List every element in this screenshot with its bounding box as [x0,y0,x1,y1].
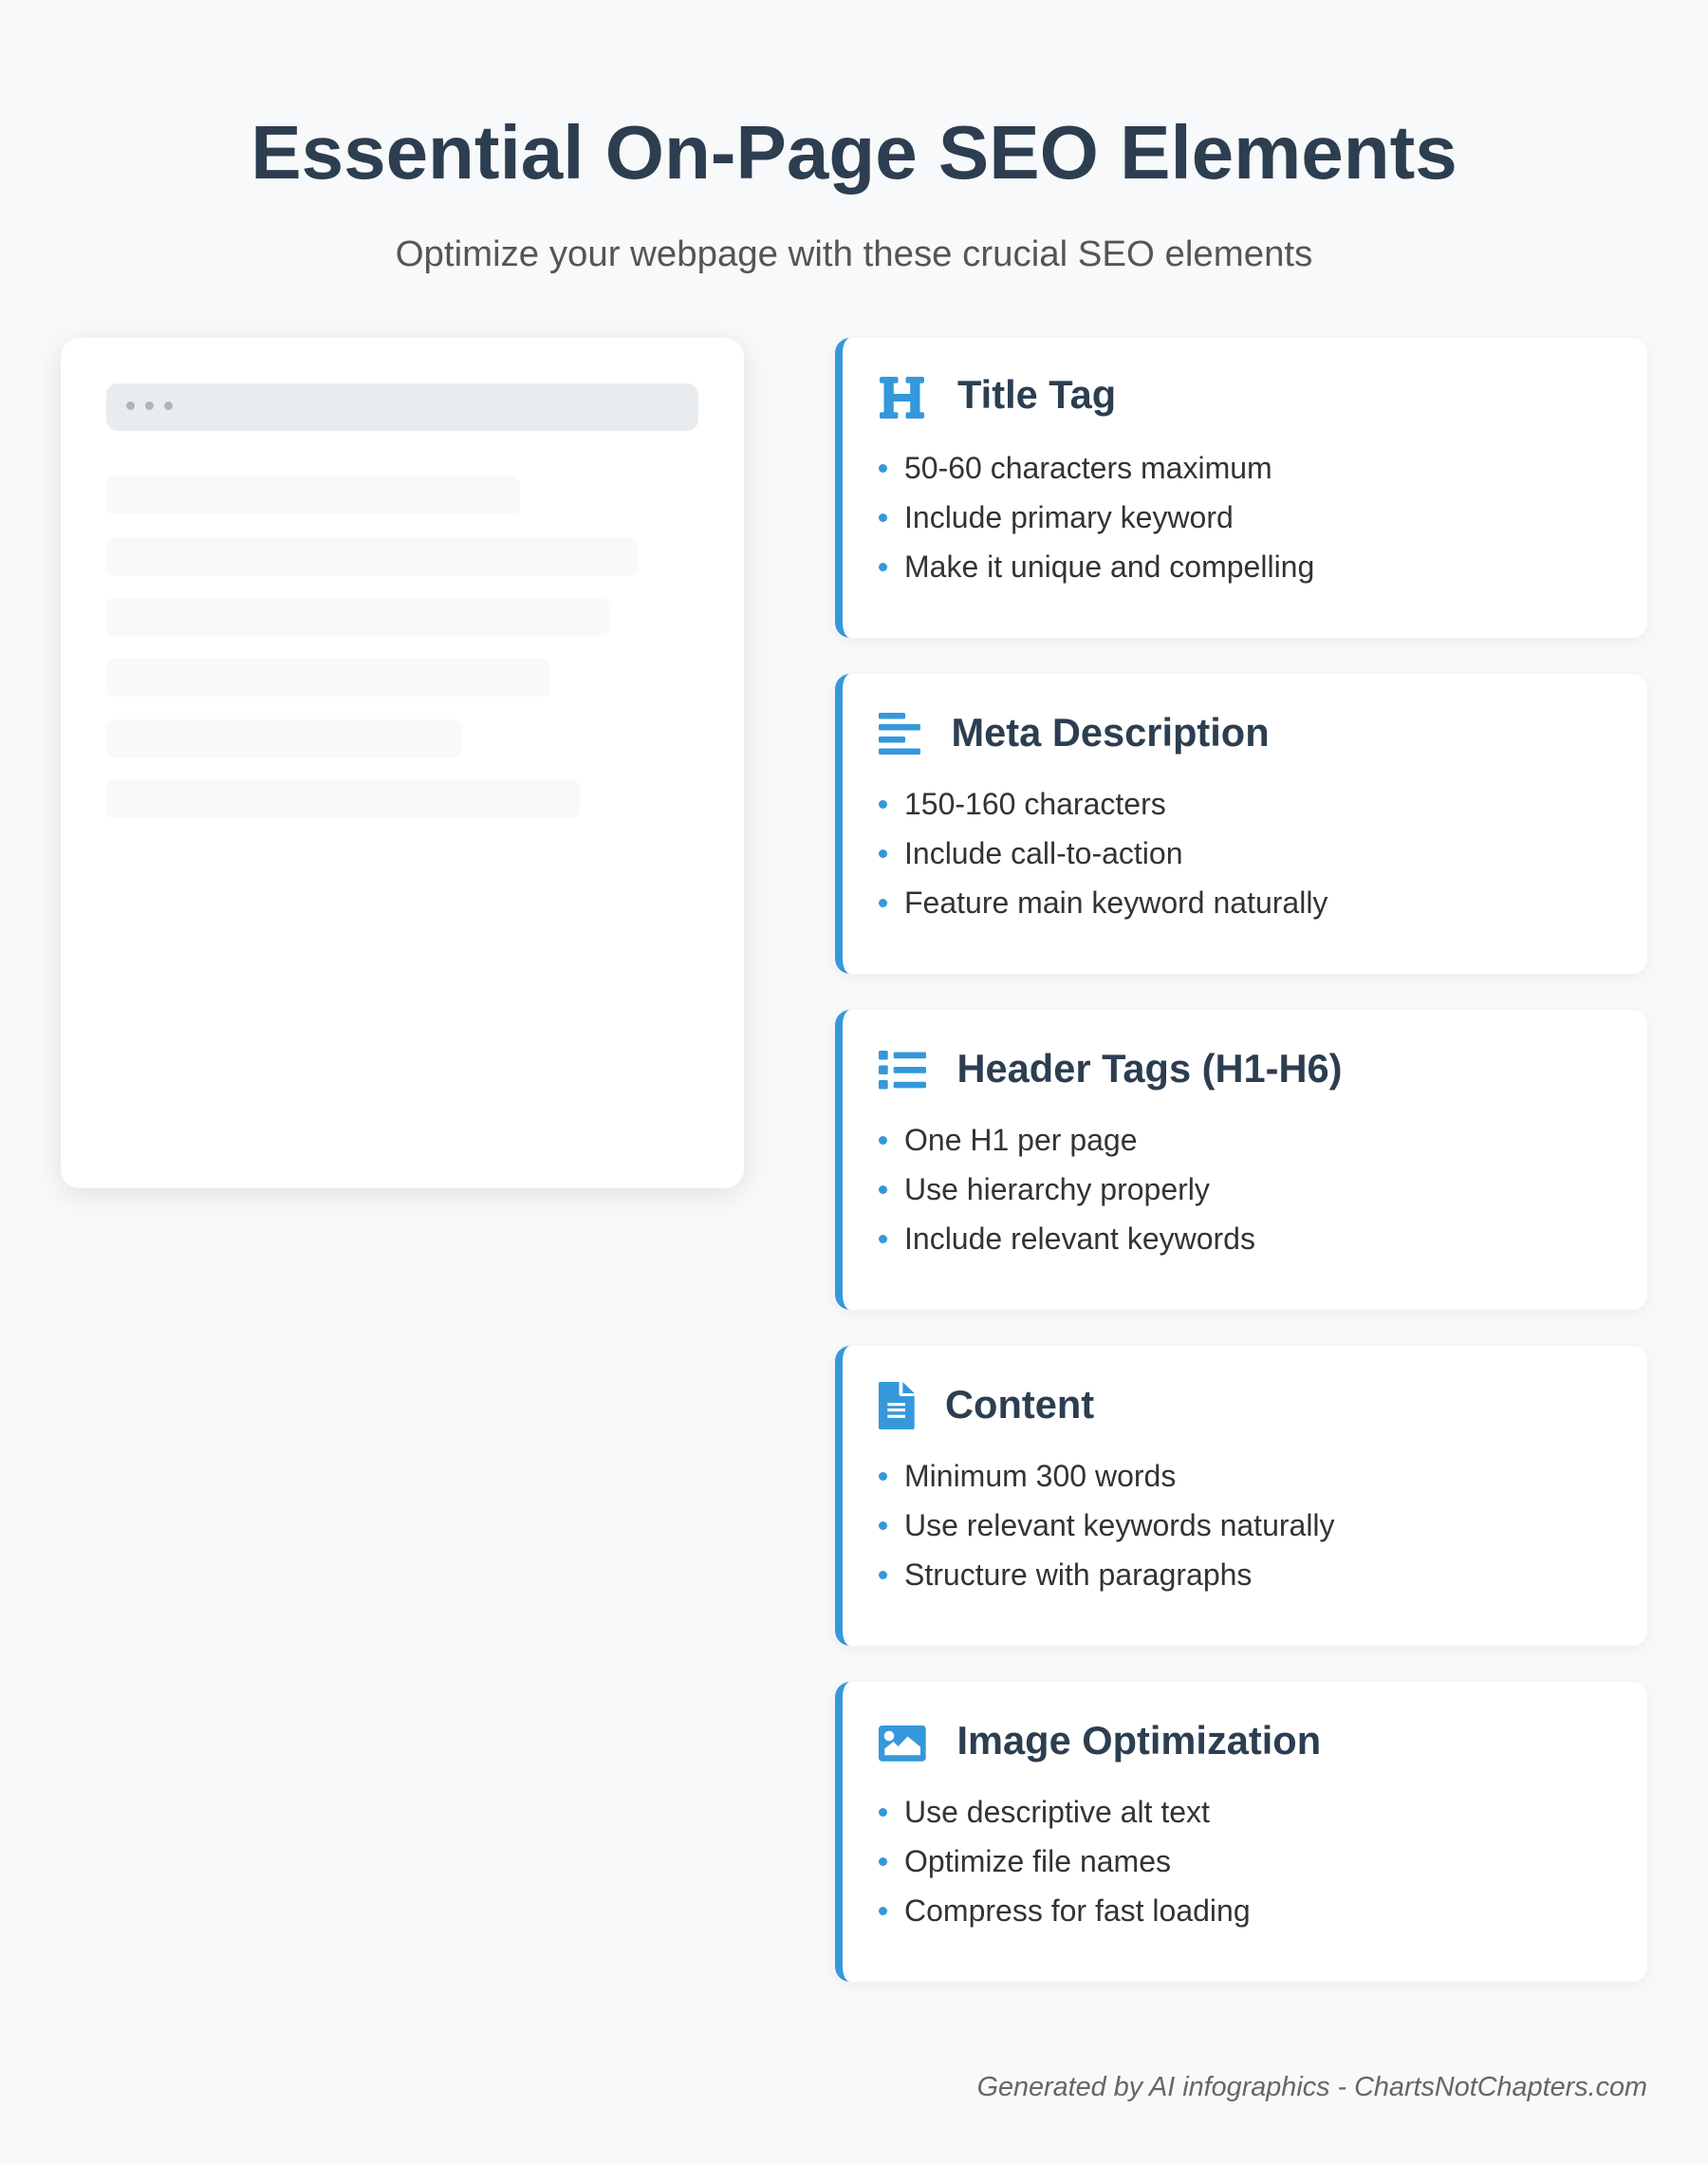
bullet list: One H1 per page [904,1123,1137,1157]
heading: Content [945,1382,1094,1427]
panel: meta description [835,674,1647,974]
panel: title tag [835,338,1647,638]
bullet list [879,1459,1335,1592]
placeholder content rows [61,476,744,818]
heading: Title Tag [957,372,1116,417]
bullet list: 50-60 characters maximum [904,451,1272,485]
panel: image optimization [835,1682,1647,1982]
bullet list: Optimize file names [904,1844,1171,1878]
title: Essential On-Page SEO Elements [251,110,1457,195]
footer credit: Generated by AI infographics - ChartsNotChapters.com [977,2072,1647,2102]
bullet list: Use relevant keywords naturally [904,1508,1335,1542]
heading: Meta Description [951,710,1270,755]
bullet list: Feature main keyword naturally [904,886,1327,920]
icon: image [879,1726,926,1762]
bullet list: Include primary keyword [904,500,1234,534]
heading: Image Optimization [956,1718,1321,1763]
icon: heading [880,377,924,419]
bullet list: 150-160 characters [904,787,1166,821]
icon: document [879,1382,915,1429]
bullet list: Minimum 300 words [904,1459,1176,1493]
panel: webpage mockup [61,338,744,1188]
bullet list: Structure with paragraphs [904,1558,1252,1592]
bullet list: Use descriptive alt text [904,1795,1210,1829]
bullet list [879,451,1314,584]
heading: Header Tags (H1-H6) [956,1046,1343,1091]
bullet list: Include call-to-action [904,836,1182,870]
bullet list: Include relevant keywords [904,1222,1255,1256]
bullet list [879,787,1328,920]
browser bar [106,383,698,431]
panel: header tags [835,1010,1647,1310]
bullet list: Compress for fast loading [904,1894,1251,1928]
subtitle: Optimize your webpage with these crucial SEO elements [396,233,1312,274]
icon: list [879,1051,926,1090]
icon: align left [879,713,920,755]
bullet list: Use hierarchy properly [904,1172,1210,1206]
bullet list [879,1123,1255,1256]
bullet list: Make it unique and compelling [904,550,1314,584]
panel: content [835,1346,1647,1646]
bullet list [879,1795,1251,1928]
